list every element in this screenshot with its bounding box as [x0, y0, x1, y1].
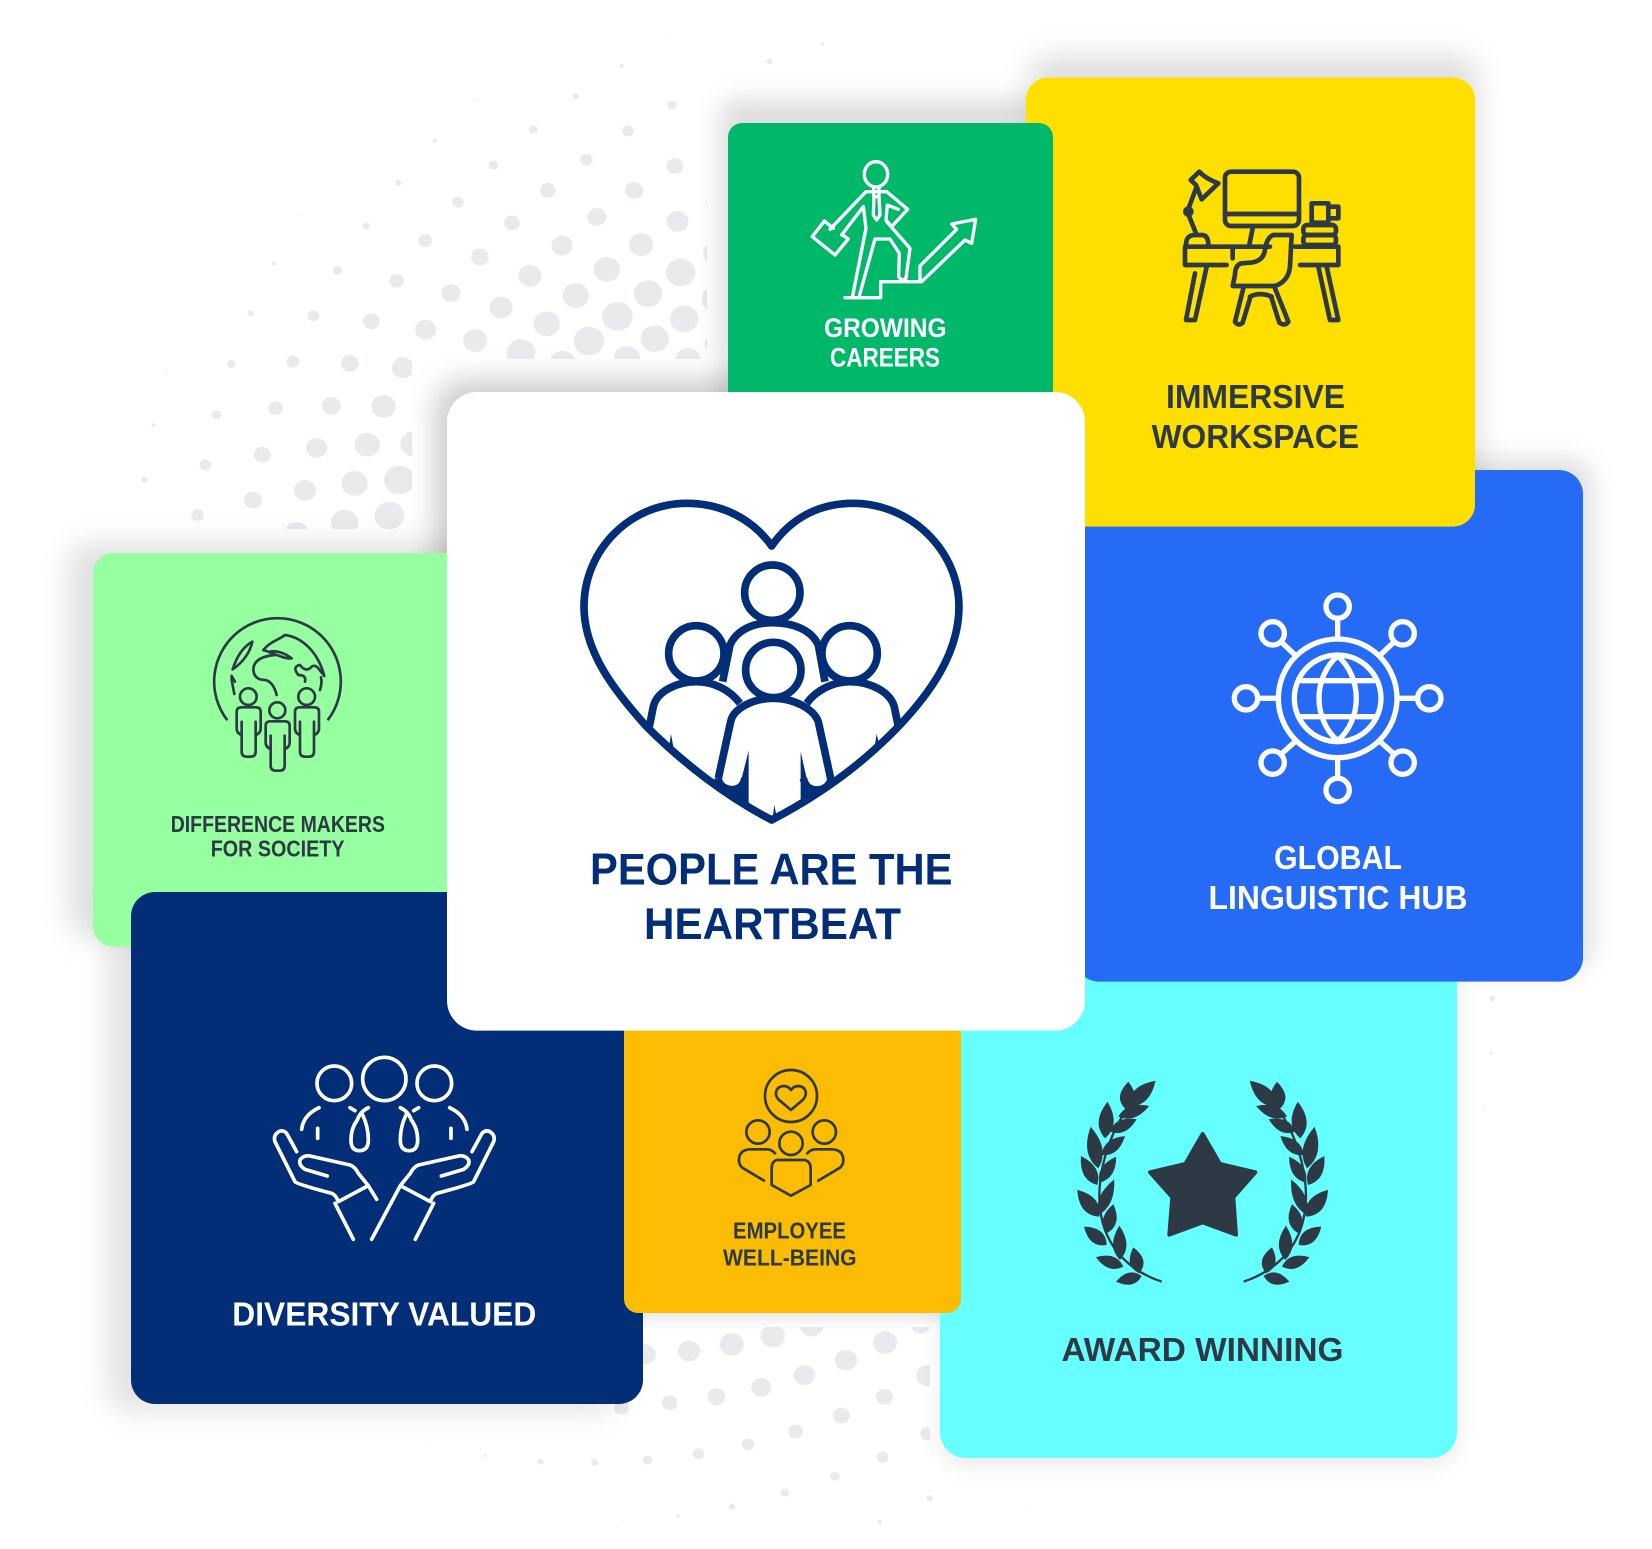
white masks clipping the dot pattern — [40, 79, 1470, 1480]
label: difference makers for society — [171, 811, 385, 862]
label: employee well-being — [723, 1218, 857, 1270]
panel: global linguistic hub — [1075, 470, 1583, 982]
panel: difference makers for society — [93, 553, 513, 946]
label: growing careers: CAREERS — [830, 342, 940, 372]
label: global linguistic hub: GLOBAL — [1274, 839, 1402, 877]
panel: people are the heartbeat — [447, 392, 1085, 1031]
dot pattern: lower right — [830, 995, 1496, 1524]
label: growing careers — [824, 313, 947, 372]
icon: people with heart — [739, 1070, 843, 1196]
heading: people are the heartbeat — [590, 846, 952, 949]
label: award winning: AWARD WINNING — [1062, 1331, 1344, 1369]
heading: people are the heartbeat: PEOPLE ARE THE — [590, 846, 952, 895]
label: employee well-being: EMPLOYEE — [733, 1218, 846, 1244]
label: employee well-being: WELL-BEING — [723, 1244, 857, 1270]
icon: heart with group of people — [584, 503, 959, 820]
panel: growing careers — [728, 123, 1053, 453]
label: immersive workspace: IMMERSIVE — [1166, 378, 1345, 416]
panel: employee well-being — [624, 1000, 961, 1313]
label: global linguistic hub — [1208, 839, 1468, 917]
icon: star in laurel wreath — [1071, 1075, 1334, 1288]
icon: desk with monitor and chair — [1185, 172, 1338, 324]
heading: people are the heartbeat: HEARTBEAT — [644, 900, 901, 949]
label: diversity valued: DIVERSITY VALUED — [232, 1296, 536, 1334]
label: immersive workspace — [1152, 378, 1359, 456]
icon: globe network — [1234, 595, 1441, 802]
icon: globe with three people — [214, 618, 341, 771]
icon: hands holding people — [274, 1057, 494, 1239]
label: immersive workspace: WORKSPACE — [1152, 418, 1359, 456]
panel: award winning — [940, 950, 1457, 1458]
dot pattern: lower centre — [64, 965, 823, 1522]
label: growing careers: GROWING — [824, 313, 947, 343]
label: global linguistic hub: LINGUISTIC HUB — [1208, 879, 1468, 917]
label: difference makers for society: DIFFERENCE MAKERS — [171, 811, 385, 837]
icon: businessman climbing steps — [812, 162, 976, 298]
panel: diversity valued — [131, 892, 643, 1404]
dot pattern: upper left — [141, 37, 824, 544]
panel: immersive workspace — [1026, 78, 1475, 527]
label: difference makers for society: FOR SOCIETY — [211, 836, 345, 862]
